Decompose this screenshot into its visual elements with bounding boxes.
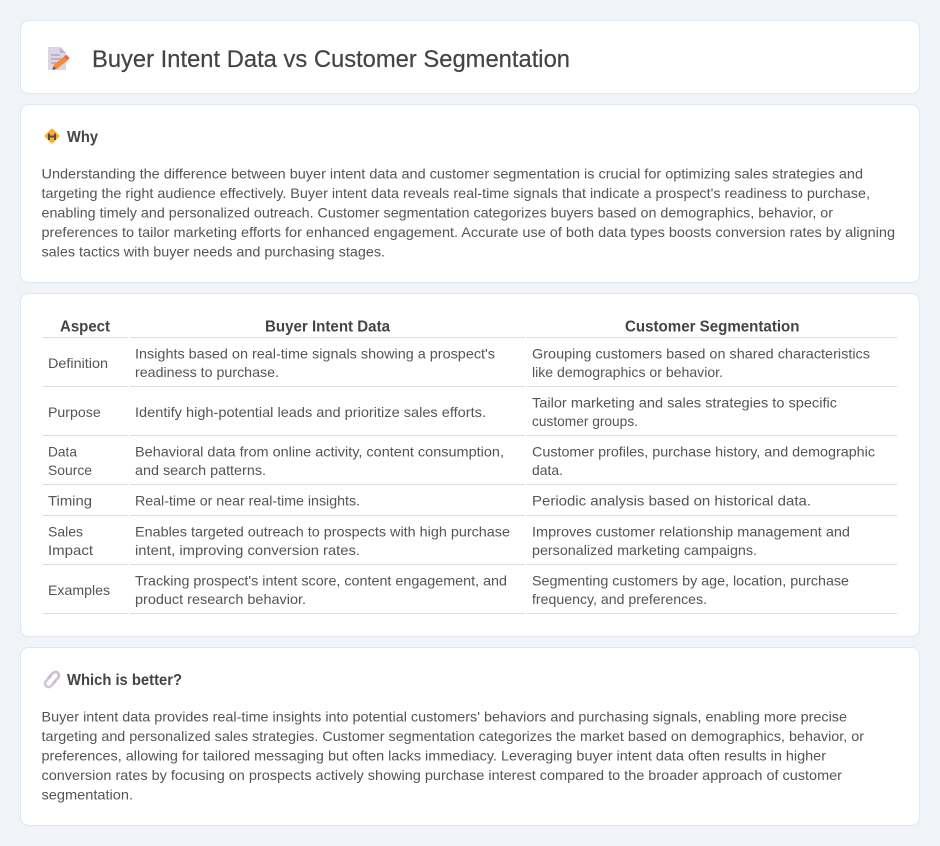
table header row xyxy=(43,318,897,338)
table row: sales impact: Enables targeted outreach to prospects with high purchase xyxy=(135,524,510,540)
text block: why explanation: sales tactics with buyer needs and purchasing stages. xyxy=(42,244,385,260)
text block: verdict: Buyer intent data provides real-time insights into potential customers' behaviors and purchasing signals, enabling more precise xyxy=(42,708,847,724)
table row: timing: Periodic analysis based on historical data. xyxy=(532,492,811,508)
table row: timing: Real-time or near real-time insights. xyxy=(135,492,360,508)
table row: data source: data. xyxy=(532,462,563,478)
text block: verdict: targeting and personalized sales strategies. Customer segmentation categorizes the market based on demographics, behavior, or xyxy=(42,728,864,744)
table row: definition: readiness to purchase. xyxy=(135,364,279,380)
table row: data source: and search patterns. xyxy=(135,462,266,478)
table row: sales impact: personalized marketing campaigns. xyxy=(532,542,757,558)
table row: timing xyxy=(43,492,897,516)
table row: examples: Segmenting customers by age, location, purchase xyxy=(532,572,849,588)
text block: verdict: conversion rates by focusing on prospects actively showing purchase interest compared to the broader approach of customer xyxy=(42,767,842,783)
table row: purpose: Tailor marketing and sales strategies to specific xyxy=(532,394,837,410)
panel: which is better xyxy=(20,648,920,826)
table row: definition: like demographics or behavior. xyxy=(532,364,723,380)
table header row: Customer Segmentation xyxy=(625,318,800,336)
table row: definition xyxy=(43,346,897,387)
table row: purpose xyxy=(43,394,897,436)
heading: why: Why xyxy=(67,129,98,146)
icon: chain link xyxy=(45,672,59,687)
text block: why explanation: preferences to tailor marketing efforts for enhanced engagement. Accurate use of both data types boosts conversion rates by aligning xyxy=(42,224,895,240)
table row: data source: Source xyxy=(48,462,92,478)
table row: sales impact: Impact xyxy=(48,542,93,558)
panel: why xyxy=(20,104,920,282)
text block: verdict xyxy=(42,708,864,802)
text block: why explanation: Understanding the difference between buyer intent data and customer segmentation is crucial for optimizing sales strategies and xyxy=(42,166,863,182)
table row: purpose: customer groups. xyxy=(532,413,638,429)
table row: definition: Definition xyxy=(48,355,108,371)
text block: why explanation: targeting the right audience effectively. Buyer intent data reveals real-time signals that indicate a prospect's readiness to purchase, xyxy=(42,185,870,201)
table row: data source xyxy=(43,444,897,485)
text block: verdict: preferences, allowing for tailored messaging but often lacks immediacy. Leveraging buyer intent data often results in higher xyxy=(42,748,826,764)
text block: why explanation xyxy=(42,166,895,260)
table header row: Aspect xyxy=(60,318,110,336)
table row: examples xyxy=(43,572,897,614)
table row: examples: product research behavior. xyxy=(135,591,306,607)
table row: purpose: Identify high-potential leads and prioritize sales efforts. xyxy=(135,404,486,420)
table row: data source: Customer profiles, purchase history, and demographic xyxy=(532,444,875,460)
icon: document with pencil xyxy=(48,47,70,70)
table row: examples: Examples xyxy=(48,582,110,598)
table row: timing: Timing xyxy=(48,492,92,508)
title: Buyer Intent Data vs Customer Segmentation xyxy=(92,46,570,73)
table row: examples: frequency, and preferences. xyxy=(532,591,707,607)
table row: purpose: Purpose xyxy=(48,404,101,420)
table row: sales impact: Improves customer relationship management and xyxy=(532,524,850,540)
table header row: Buyer Intent Data xyxy=(265,318,390,336)
table row: definition: Grouping customers based on shared characteristics xyxy=(532,346,870,362)
table row: sales impact: Sales xyxy=(48,524,83,540)
heading: which is better: Which is better? xyxy=(67,672,182,689)
table row: sales impact xyxy=(43,524,897,565)
table row: definition: Insights based on real-time signals showing a prospect's xyxy=(135,346,495,362)
table row: data source: Behavioral data from online activity, content consumption, xyxy=(135,444,504,460)
icon: orange diamond sign xyxy=(44,128,60,144)
text block: why explanation: enabling timely and personalized outreach. Customer segmentation categorizes buyers based on demographics, behavior, or xyxy=(42,204,833,220)
panel: comparison table xyxy=(20,294,920,636)
table row: sales impact: intent, improving conversion rates. xyxy=(135,542,360,558)
table row: data source: Data xyxy=(48,444,77,460)
table row: examples: Tracking prospect's intent score, content engagement, and xyxy=(135,572,507,588)
text block: verdict: segmentation. xyxy=(42,786,133,802)
panel: title header xyxy=(20,20,920,94)
